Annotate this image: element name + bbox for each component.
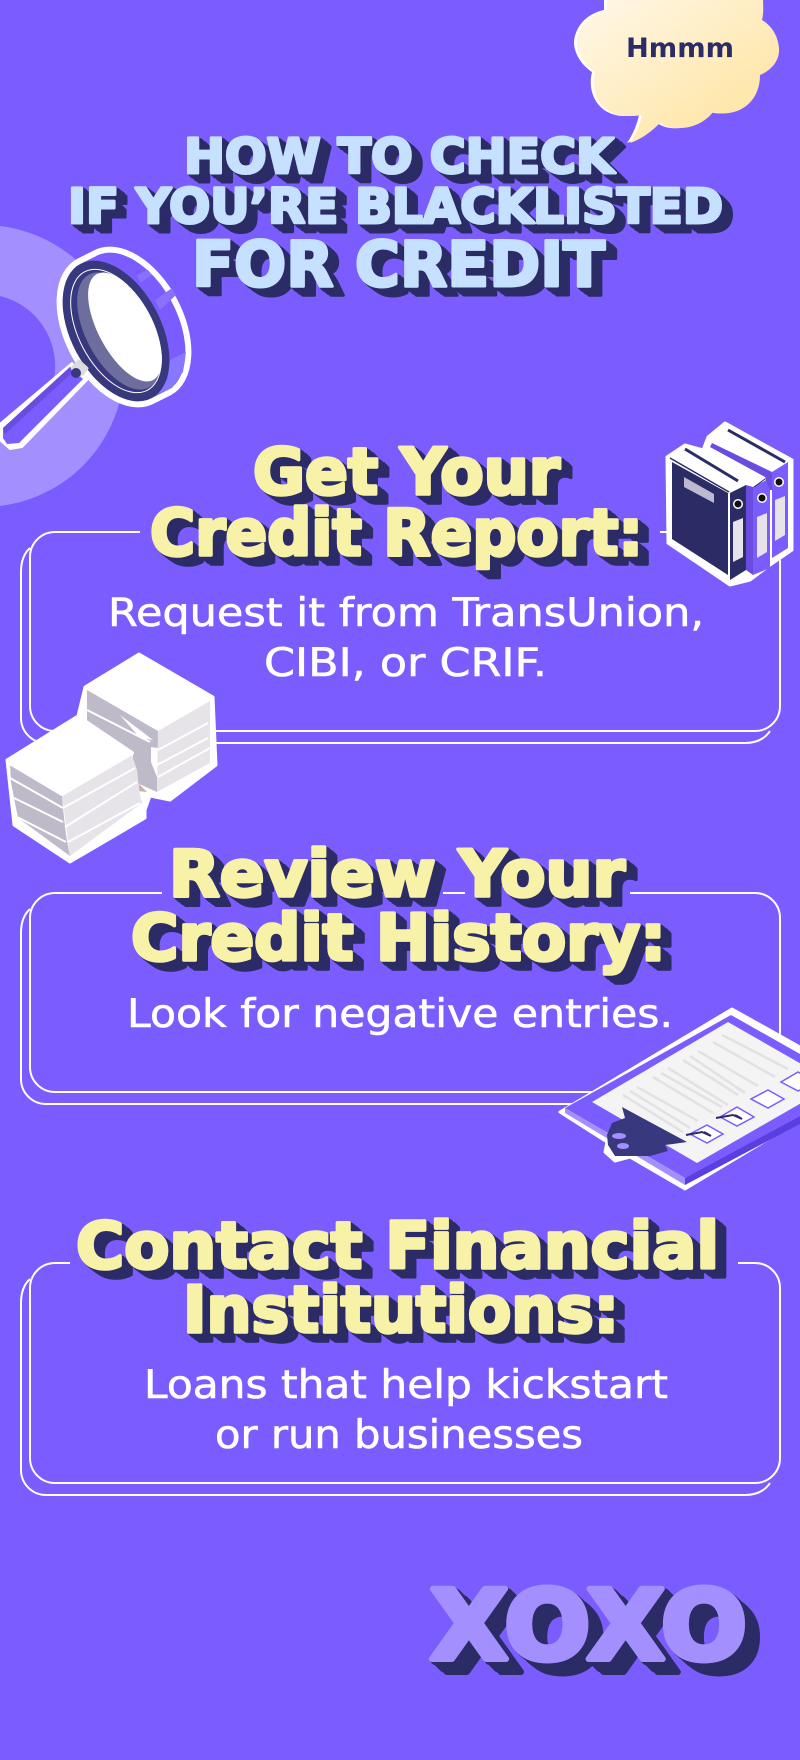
body text 3 <box>144 1363 668 1458</box>
heading: contact financial institutions <box>76 1210 719 1348</box>
body text 2: Look for negative entries. <box>127 992 673 1037</box>
heading: get your credit report: Get Your <box>253 436 560 510</box>
heading: review your credit history <box>131 838 666 976</box>
heading: get your credit report: Credit Report: <box>150 497 643 571</box>
body text 3: or run businesses <box>215 1413 583 1458</box>
icon: magnifying glass <box>1 235 207 449</box>
speech bubble <box>574 0 779 143</box>
heading: get your credit report <box>150 436 643 571</box>
panel: get your credit report <box>21 532 780 743</box>
icon: binders <box>667 423 792 585</box>
title: IF YOU’RE BLACKLISTED <box>68 179 723 235</box>
body text 1: CIBI, or CRIF. <box>264 641 547 686</box>
sign-off: xoxo: XOXO <box>430 1570 747 1682</box>
background ring behind magnifier <box>0 226 124 506</box>
panel: contact financial institutions <box>21 1263 780 1495</box>
heading: contact financial institutions: Contact Financial <box>76 1210 719 1284</box>
heading: contact financial institutions: Institutions: <box>183 1274 619 1348</box>
icon: paper stacks <box>7 654 216 862</box>
body text 1 <box>108 591 704 686</box>
heading: review your credit history: Review Your <box>169 838 625 912</box>
title: HOW TO CHECK <box>184 129 616 185</box>
panel: review your credit history <box>21 893 780 1104</box>
icon: clipboard <box>560 1009 800 1189</box>
title: FOR CREDIT <box>192 228 605 301</box>
body text 1: Request it from TransUnion, <box>108 591 704 636</box>
heading: review your credit history: Credit History: <box>131 902 666 976</box>
speech bubble text: Hmmm <box>626 33 734 64</box>
title <box>68 129 723 301</box>
body text 3: Loans that help kickstart <box>144 1363 668 1408</box>
